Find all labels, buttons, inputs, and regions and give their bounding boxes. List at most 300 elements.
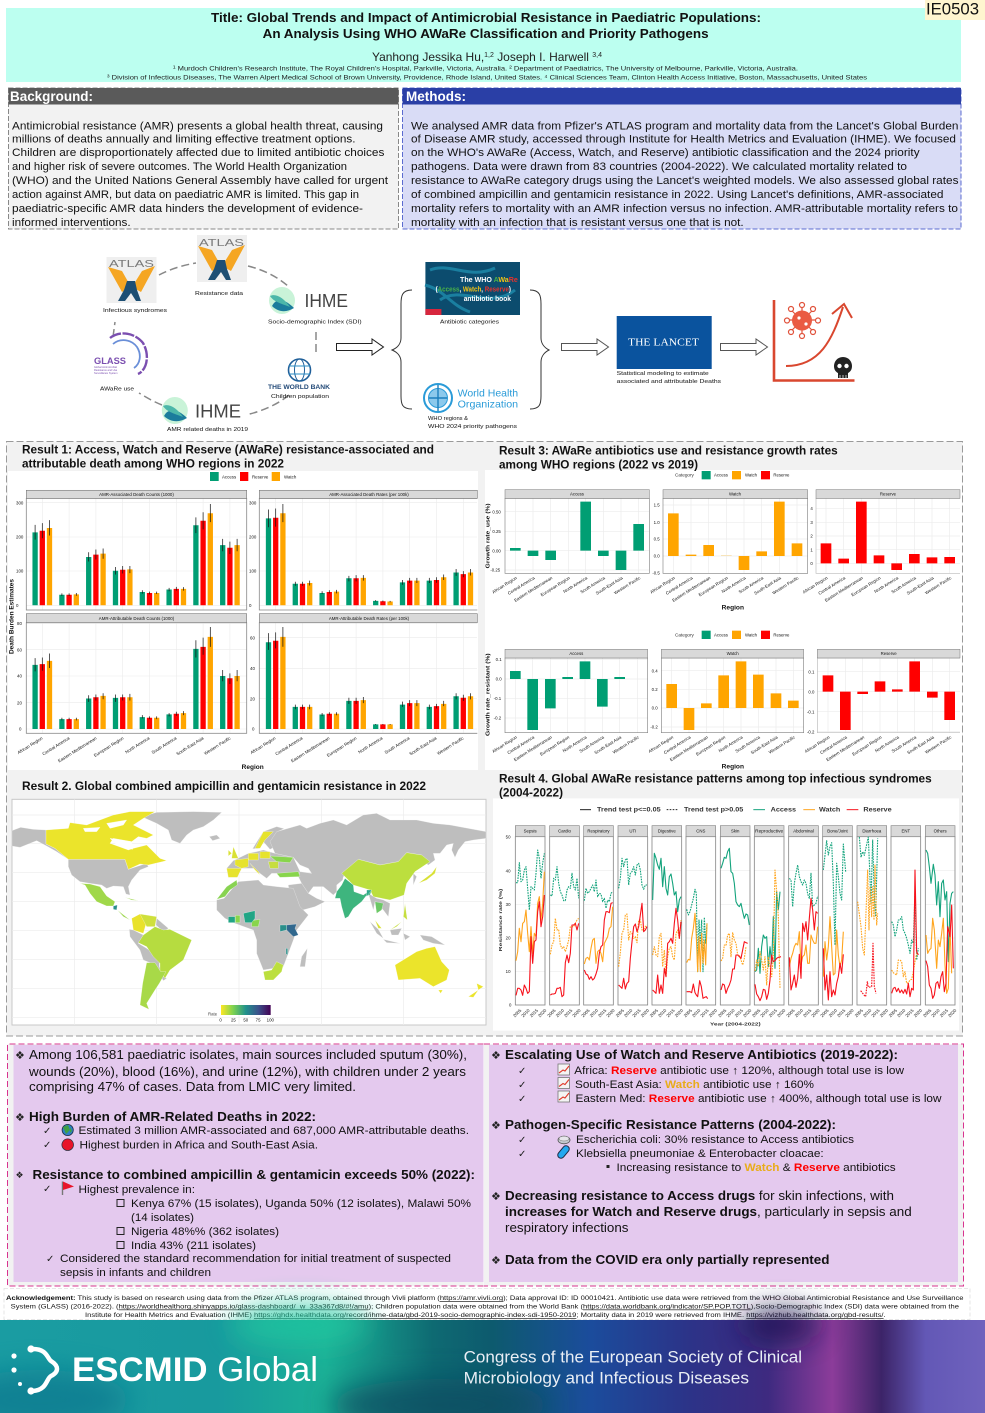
series: diarrhoea (858, 837, 878, 997)
x tick years: 2010 (555, 1007, 565, 1018)
panel chart: access use: 0.50 (492, 509, 501, 514)
series: cardio (550, 867, 579, 997)
x tick years: 2010 (725, 1007, 736, 1018)
map colour legend: 50 (243, 1018, 249, 1023)
x labels row 1: North America (721, 575, 747, 594)
finding: combined resistance: Resistance to combined ampicillin & gentamicin exceeds 50% (2022): (32, 1167, 475, 1182)
legend: Watch (284, 474, 297, 480)
panel: background: action against AMR, but data on paediatric AMR is limited. This gap in (12, 189, 359, 201)
x tick years: 2010 (657, 1007, 668, 1018)
facet strips: Cardio (558, 829, 571, 834)
x labels row 1: European Region (698, 575, 729, 597)
x labels row 1: South America (738, 575, 765, 594)
panel chart: attributable death rates (250, 614, 477, 733)
x tick years: 2020 (674, 1007, 684, 1018)
facet strips: Sepsis (524, 829, 537, 834)
finding: high burden (15, 1109, 469, 1152)
panel chart: attributable death counts (17, 614, 247, 733)
x tick years: 2015 (904, 1007, 915, 1018)
finding: escalating use: ✓ (518, 1066, 526, 1077)
x labels row 1: African Region (491, 575, 518, 595)
facet strips: Bone/Joint (827, 829, 849, 834)
panel chart: associated death rates (249, 490, 477, 610)
panel chart: associated death counts: AMR-Associated Death Counts (1000) (99, 492, 174, 497)
panel: methods: resistance to AWaRe category drugs using the Lancet's weighted models. We also assessed global rates (411, 175, 959, 187)
panel chart: reserve resistance: 0.1 (808, 669, 815, 674)
panel chart: attributable death counts: AMR-Attributable Death Counts (1000) (99, 616, 175, 621)
map: combined resistance by country (12, 799, 486, 1025)
panel chart: access use: 0.25 (492, 529, 501, 534)
icon: World Bank: THE WORLD BANK (268, 384, 330, 391)
legend: use growth: Access (714, 473, 728, 478)
abstract id badge: IE0503 (926, 0, 979, 18)
finding: escalating use: Escalating Use of Watch and Reserve Antibiotics (2019-2022): (505, 1047, 898, 1062)
x tick years: 2015 (836, 1007, 847, 1018)
x axis labels left: Eastern Mediterranean (57, 735, 98, 764)
icon: IHME logo SDI (269, 287, 348, 314)
horizontal grid and frames (515, 837, 955, 1005)
x labels row 2: South-East Asia (593, 734, 623, 755)
finding: isolates: comprising 47% of cases. Data from LMIC very limited. (29, 1079, 356, 1094)
x labels row 2: Eastern Mediterranean (669, 734, 709, 762)
finding: pathogen patterns (491, 1117, 896, 1174)
panel chart: associated death counts: 0 (16, 603, 19, 608)
panel chart: associated death rates: 100 (249, 569, 257, 574)
x labels row 2: South America (578, 734, 605, 754)
x axis labels left: South-East Asia (175, 735, 205, 756)
x tick years: 2010 (930, 1007, 941, 1018)
finding: pathogen patterns: Escherichia coli: 30% resistance to Access antibiotics (576, 1134, 855, 1146)
y ticks: 20 (506, 936, 511, 941)
facet strips: Respiratory (587, 829, 610, 834)
finding: pathogen patterns: ❖ (491, 1119, 501, 1132)
finding: escalating use: South-East Asia: Watch antibiotic use ↑ 160% (575, 1079, 814, 1091)
x labels row 2: Central America (663, 734, 692, 755)
panel chart: watch resistance: 0.4 (652, 668, 658, 673)
panel: methods: mortality with an infection that is resistant versus one that is not. (411, 217, 744, 229)
x axis labels right: Eastern Mediterranean (290, 735, 331, 764)
facet strips: Abdominal (793, 829, 814, 834)
panel chart: watch use: Watch (729, 491, 742, 496)
x tick years: 2010 (862, 1007, 873, 1018)
label: Resistance data (195, 291, 243, 297)
icon: World Health Organization logo (424, 384, 518, 412)
finding: isolates: wounds (20%), blood (16%), and urine (12%), with children under 2 years (28, 1064, 467, 1079)
x tick years: 2005 (717, 1007, 728, 1018)
panel chart: reserve use: Reserve (880, 491, 897, 496)
panel: key findings right (484, 1044, 964, 1286)
label: AMR related deaths in 2019 (167, 427, 248, 433)
x tick years: 2010 (794, 1007, 804, 1018)
x labels row 2: African Region (647, 734, 675, 754)
result 4 heading: Result 4. Global AWaRe resistance patterns among top infectious syndromes (499, 772, 932, 786)
x tick years: 2015 (734, 1007, 744, 1018)
right brace (530, 290, 549, 409)
y axis title: Resistance rate (%) (498, 888, 504, 951)
legend: resistance growth (675, 631, 790, 639)
panel chart: associated death counts: 100 (16, 569, 24, 574)
x labels row 1: African Region (802, 575, 829, 595)
banner: ESCMID Global congress (0, 1305, 985, 1413)
x tick years: 2005 (751, 1007, 762, 1018)
label: Socio-demographic Index (SDI) (268, 320, 362, 326)
map colour legend: 100 (267, 1018, 274, 1023)
panel chart: associated death rates: AMR-Associated Death Rates (per 100k) (329, 492, 409, 497)
x tick years: 2015 (563, 1007, 574, 1018)
panel chart: reserve resistance (807, 649, 960, 734)
x labels row 1: African Region (649, 575, 676, 595)
x axis labels left: North America (124, 735, 151, 755)
acknowledgement: Acknowledgement: This study is based on research using data from the Pfizer ATLAS program, obtained through Vivli platform ( https://amr.vivli.org ); Data approval ID: ID 00010421. Antibiotic use data were retrieved from the WHO Global Antimicrobial Resistance and Use Surveillance (6, 1295, 964, 1302)
title block: 3,4 (592, 52, 602, 59)
label: Statistical modeling to estimate (617, 371, 709, 377)
icon: GLASS logo (94, 333, 147, 375)
y ticks: 10 (506, 969, 511, 974)
x axis labels right: South-East Asia (408, 735, 438, 756)
x tick years: 2020 (571, 1007, 582, 1018)
label (428, 416, 518, 430)
panel chart: reserve resistance: 0.0 (808, 689, 815, 694)
panel: results background (6, 442, 962, 1036)
facet strips: CNS (696, 829, 706, 834)
facet strips: Digestive (658, 829, 676, 834)
x labels row 2: Central America (819, 734, 848, 755)
x tick years: 2010 (828, 1007, 838, 1018)
panel chart: reserve resistance: -0.1 (807, 709, 815, 714)
panel chart: attributable death rates: 0 (252, 727, 255, 732)
panel chart: attributable death rates: 60 (250, 635, 255, 640)
x labels row 2: South America (891, 734, 918, 754)
legend (210, 472, 297, 481)
x tick years: 2005 (922, 1007, 933, 1018)
panel chart: watch resistance: -0.2 (650, 725, 658, 730)
left brace (392, 290, 412, 409)
panel: background: millions of deaths annually and limiting effective treatment options. (12, 134, 356, 146)
facet strips (515, 826, 955, 837)
icon: red dot (62, 1139, 74, 1150)
panel chart: associated death rates: 0 (249, 603, 252, 608)
x axis labels right: African Region (249, 735, 277, 755)
x axis labels left: Central America (41, 735, 71, 756)
panel chart: attributable death counts: 20 (17, 700, 22, 705)
finding: escalating use (491, 1047, 942, 1105)
x labels row 1: South-East Asia (906, 575, 935, 596)
chart: result 4 resistance trends (493, 798, 959, 1031)
title block: Yanhong Jessika Hu, (372, 50, 485, 64)
y axis title: Death Burden Estimates (10, 578, 16, 654)
x labels row 2: Western Pacific (768, 734, 797, 755)
panel: methods: on the WHO's AWaRe (Access, Watch, and Reserve) antibiotic classification and the 2024 priority (411, 147, 920, 159)
x labels row 2: South America (734, 734, 761, 754)
icon: World Bank (268, 359, 330, 391)
grey countries without data (12, 812, 486, 981)
x tick years: 2015 (768, 1007, 778, 1018)
x axis labels right (249, 735, 465, 764)
finding: decreasing resistance: increases for Watch and Reserve drugs , particularly in sepsis and (505, 1204, 912, 1219)
x axis labels right: South America (384, 735, 411, 755)
x labels row 2: North America (562, 734, 588, 753)
label: WHO regions & (428, 416, 469, 422)
finding: escalating use: ✓ (518, 1080, 526, 1091)
x tick years: 2005 (819, 1007, 830, 1018)
series: others (926, 850, 953, 998)
label: Children population (271, 394, 329, 400)
finding: combined resistance (16, 1167, 475, 1279)
x labels row 1: South-East Asia (595, 575, 624, 596)
finding: high burden: ❖ (15, 1111, 25, 1124)
panel: methods: pathogens. Data were drawn from 83 countries (2004-2022). We calculated mortality related to (411, 161, 907, 173)
x tick years (512, 1007, 958, 1018)
x axis title: Year (2004-2022) (710, 1021, 761, 1027)
x tick years: 2015 (870, 1007, 881, 1018)
x tick years: 2020 (537, 1007, 548, 1018)
label: Antibiotic categories (440, 320, 499, 326)
x tick years: 2005 (580, 1007, 591, 1018)
series: skin (721, 848, 749, 993)
congress name (464, 1348, 802, 1388)
y ticks: 0 (509, 1003, 512, 1008)
panel chart: reserve use (810, 490, 960, 573)
panel chart: attributable death counts: 40 (17, 674, 22, 679)
x tick years: 2005 (546, 1007, 557, 1018)
finding: combined resistance: Nigeria 48%% (362 isolates) (131, 1226, 279, 1238)
map colour legend (208, 1005, 274, 1023)
finding: decreasing resistance: Decreasing resistance to Access drugs for skin infections, with (505, 1188, 894, 1203)
panel chart: watch use: 1.0 (654, 520, 660, 525)
legend: resistance growth: Category (675, 632, 695, 637)
icon: WHO AWaRe book cover: antibiotic book (464, 296, 511, 303)
panel chart: access resistance: -0.2 (494, 716, 502, 721)
icon: mini trend chart (558, 1091, 570, 1102)
x labels row 2: Central America (506, 734, 536, 755)
x labels row 2: Western Pacific (612, 734, 641, 755)
x labels row 2: European Region (695, 734, 727, 757)
finding: escalating use: Africa: Reserve antibiotic use ↑ 120%, although total use is low (574, 1065, 904, 1077)
panel chart: access resistance (494, 649, 648, 733)
finding: pathogen patterns: ✓ (518, 1149, 526, 1160)
finding: isolates (15, 1047, 467, 1094)
legend: Access (222, 474, 237, 480)
icon: ATLAS logo top: ATLAS (199, 238, 244, 249)
x labels row 1: North America (873, 575, 900, 594)
title block: 1,2 (484, 52, 494, 59)
facet strips: Diarrhoea (862, 829, 882, 834)
facet strips: Others (934, 829, 947, 834)
y axis title: resistance: Growth rate_resistant (%) (485, 653, 491, 736)
icon: GLASS logo: Global Antimicrobial (94, 365, 117, 369)
panel chart: access resistance: 0.0 (496, 677, 502, 682)
panel chart: access use: Access (570, 491, 584, 496)
icon: mini trend chart (558, 1064, 570, 1075)
finding: decreasing resistance (491, 1188, 912, 1235)
x tick years: 2005 (683, 1007, 693, 1018)
icon: GLASS logo: GLASS (94, 356, 126, 367)
x tick years: 2020 (947, 1007, 958, 1018)
panel chart: watch use: -0.5 (652, 571, 660, 576)
x tick years: 2015 (699, 1007, 710, 1018)
panel: background: Background: (10, 89, 93, 104)
x axis labels left: European Region (93, 735, 125, 758)
finding: escalating use: Eastern Med: Reserve antibiotic use ↑ 400%, although total use is low (576, 1093, 942, 1105)
legend: use growth: Reserve (773, 473, 790, 478)
x labels row 2: Eastern Mediterranean (513, 734, 553, 762)
series: sepsis (516, 850, 544, 995)
y ticks: 30 (506, 902, 511, 907)
finding: covid era: Data from the COVID era only partially represented (505, 1252, 830, 1267)
finding: decreasing resistance: ❖ (491, 1190, 501, 1203)
Lancet box (617, 316, 712, 369)
panel: background: Children are disproportionately affected due to limited antibiotic choices (12, 147, 385, 159)
x tick years: 2005 (512, 1007, 523, 1018)
panel: methods: mortality refers to mortality with an AMR infection versus no infection. AMR-attributable mortality refers to (411, 203, 958, 215)
panel chart: watch resistance: Watch (727, 651, 739, 656)
panel chart: watch use: 0.0 (654, 554, 660, 559)
x tick years: 2020 (776, 1007, 787, 1018)
arrow: model to outcome (720, 339, 768, 355)
panel chart: access use (490, 490, 649, 573)
x tick years: 2005 (649, 1007, 659, 1018)
finding: decreasing resistance: respiratory infections (505, 1220, 629, 1235)
icon: petri dish (558, 1136, 570, 1144)
icon: skull (834, 357, 852, 378)
label: WHO 2024 priority pathogens (428, 424, 518, 430)
finding: covid era: ❖ (491, 1254, 501, 1267)
finding: high burden: ✓ (43, 1140, 51, 1151)
icon: World Health Organization logo: World Health (458, 388, 518, 400)
panel chart: access resistance: 0.1 (496, 657, 502, 662)
x labels row 1 (491, 575, 953, 603)
x labels row 1: Western Pacific (924, 575, 953, 595)
finding: high burden: Highest burden in Africa and South-East Asia. (80, 1140, 318, 1152)
panel: background: informed interventions. (12, 217, 131, 229)
finding: combined resistance: ✓ (43, 1184, 51, 1195)
acknowledgement: Institute for Health Metrics and Evaluation (IHME) https://ghdx.healthdata.org/record/ihme-data/gbd-2019-socio-demographic-index-sdi-1950-2019 ; Mortality data in 2019 were retrieved from IHME. https://vizhub.healthdata.org/gbd-results/ . (85, 1312, 886, 1319)
panel chart: access resistance: Access (569, 651, 583, 656)
map colour legend: 0 (219, 1018, 222, 1023)
result 4 heading (499, 772, 932, 800)
series: ENT (892, 870, 918, 997)
icon: flag (62, 1182, 74, 1195)
result 3 heading: among WHO regions (2022 vs 2019) (499, 458, 698, 472)
result 4 heading: (2004-2022) (499, 786, 563, 800)
title block: Title: Global Trends and Impact of Antimicrobial Resistance in Paediatric Populations: (211, 10, 761, 25)
x tick years: 2015 (529, 1007, 539, 1018)
x labels row 2: Western Pacific (924, 734, 953, 755)
icon: globe (62, 1124, 73, 1136)
y axis title: use: Growth rate_use (%) (485, 503, 491, 568)
facet strips: Skin (731, 829, 740, 834)
arrow: categories to model (562, 339, 608, 355)
panel chart: reserve use: 1 (810, 547, 813, 552)
panel chart: attributable death rates: AMR-Attributable Death Rates (per 100k) (329, 616, 410, 621)
x labels row 2: North America (874, 734, 900, 753)
x tick years: 2005 (888, 1007, 898, 1018)
panel: methods: of Disease AMR study, accessed through Institute for Health Metrics and Evaluation (IHME). We focused (411, 134, 956, 146)
icon: bacterium capsule (561, 1149, 566, 1155)
panel chart: reserve resistance: Reserve (881, 651, 897, 656)
panel chart: watch use (652, 490, 808, 576)
icon: GLASS logo: Surveillance System (94, 371, 118, 375)
panel chart: associated death counts (16, 490, 247, 610)
panel chart: watch resistance (650, 649, 804, 733)
x labels row 2: South-East Asia (906, 734, 935, 755)
panel chart: associated death rates: 300 (249, 500, 257, 505)
finding: pathogen patterns: Increasing resistance to Watch & Reserve antibiotics (616, 1162, 896, 1174)
series: digestive (653, 853, 681, 993)
x labels row 1: Western Pacific (613, 575, 642, 595)
panel chart: associated death rates: 200 (249, 535, 257, 540)
arrow: sources to categories (336, 339, 384, 355)
finding: escalating use: ✓ (518, 1094, 526, 1105)
x labels row 2: European Region (539, 734, 571, 757)
x tick years: 2020 (879, 1007, 889, 1018)
icon: WHO AWaRe book cover: (Access, Watch, Reserve) (436, 286, 511, 294)
x tick years: 2010 (759, 1007, 770, 1018)
facet strips: ENT (901, 829, 911, 834)
x labels row 2: European Region (851, 734, 883, 757)
x labels row 1: Western Pacific (771, 575, 800, 595)
acknowledgement: System (GLASS) (2016-2022). ( https://worldhealthorg.shinyapps.io/glass-dashboard/_w_33a367d8/#!/amu ); Children population data were obtained from the World Bank ( https://data.worldbank.org/indicator/SP.POP.TOTL ),Socio-Demographic Index (SDI) data were obtained from the (11, 1304, 959, 1310)
congress name: Microbiology and Infectious Diseases (464, 1368, 749, 1388)
panel: background: and higher risk of severe outcomes. The World Health Organization (12, 161, 347, 173)
x tick years: 2015 (597, 1007, 608, 1018)
panel chart: attributable death rates: 20 (250, 696, 255, 701)
x labels row 2: African Region (491, 734, 518, 754)
facet strips: UTI (629, 829, 636, 834)
icon: IHME logo SDI: IHME (304, 291, 348, 311)
facet strips: Reproductive (755, 829, 784, 834)
x labels row 1: Eastern Mediterranean (671, 575, 712, 603)
wordmark: ESCMID Global (72, 1351, 318, 1389)
x tick years: 2020 (742, 1007, 753, 1018)
finding: combined resistance: Considered the standard recommendation for initial treatment of suspected (60, 1253, 451, 1265)
x axis title row 2: Region (722, 765, 744, 771)
x axis labels right: North America (357, 735, 384, 755)
x tick years: 2010 (691, 1007, 702, 1018)
result 2 heading: Result 2. Global combined ampicillin and gentamicin resistance in 2022 (22, 779, 426, 793)
panel chart: watch resistance: 0.0 (652, 706, 658, 711)
icon: ATLAS logo left (106, 257, 156, 303)
legend (580, 808, 892, 814)
panel chart: associated death counts: 200 (16, 535, 24, 540)
label (617, 371, 722, 385)
congress name: Congress of the European Society of Clinical (464, 1348, 802, 1366)
panel chart: watch use: 0.5 (654, 537, 660, 542)
x labels row 1: Eastern Mediterranean (824, 575, 864, 603)
result 1 heading: attributable death among WHO regions in 2022 (22, 456, 284, 470)
label: Infectious syndromes (103, 308, 168, 314)
panel chart: reserve use: 0 (810, 561, 813, 566)
series: reproductive (755, 870, 781, 1001)
x tick years: 2005 (854, 1007, 864, 1018)
finding: combined resistance: (14 isolates) (131, 1212, 194, 1224)
finding: high burden: ✓ (43, 1126, 51, 1137)
x labels row 2: Eastern Mediterranean (825, 734, 866, 762)
x axis title: Region (242, 765, 264, 771)
y ticks (506, 835, 512, 1008)
icon: ESCMID logo (11, 1345, 57, 1395)
x tick years: 2010 (896, 1007, 907, 1018)
panel chart: reserve resistance: -0.2 (807, 729, 815, 734)
x axis labels left: Western Pacific (203, 735, 232, 756)
panel: key findings left (8, 1044, 484, 1286)
x labels row 1: Eastern Mediterranean (513, 575, 554, 603)
map colour legend: Rate (208, 1011, 218, 1016)
x tick years: 2020 (640, 1007, 650, 1018)
finding: combined resistance: ❖ (16, 1171, 24, 1181)
x labels row 2: North America (718, 734, 744, 753)
panel chart: reserve use: 3 (810, 520, 813, 525)
